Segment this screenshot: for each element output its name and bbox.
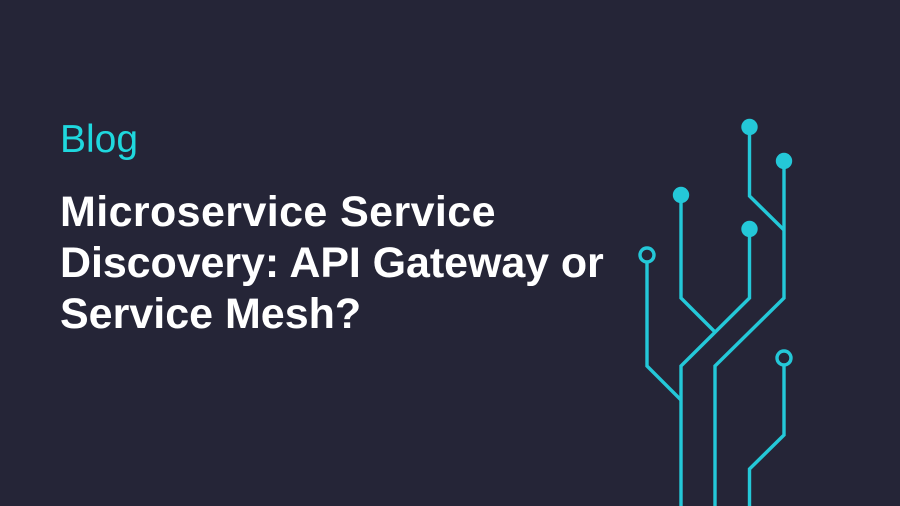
title: Microservice Service	[60, 188, 496, 236]
title: Discovery: API Gateway or	[60, 239, 604, 287]
title	[60, 188, 604, 338]
label: Blog: Blog	[60, 118, 138, 161]
title: Service Mesh?	[60, 290, 361, 338]
